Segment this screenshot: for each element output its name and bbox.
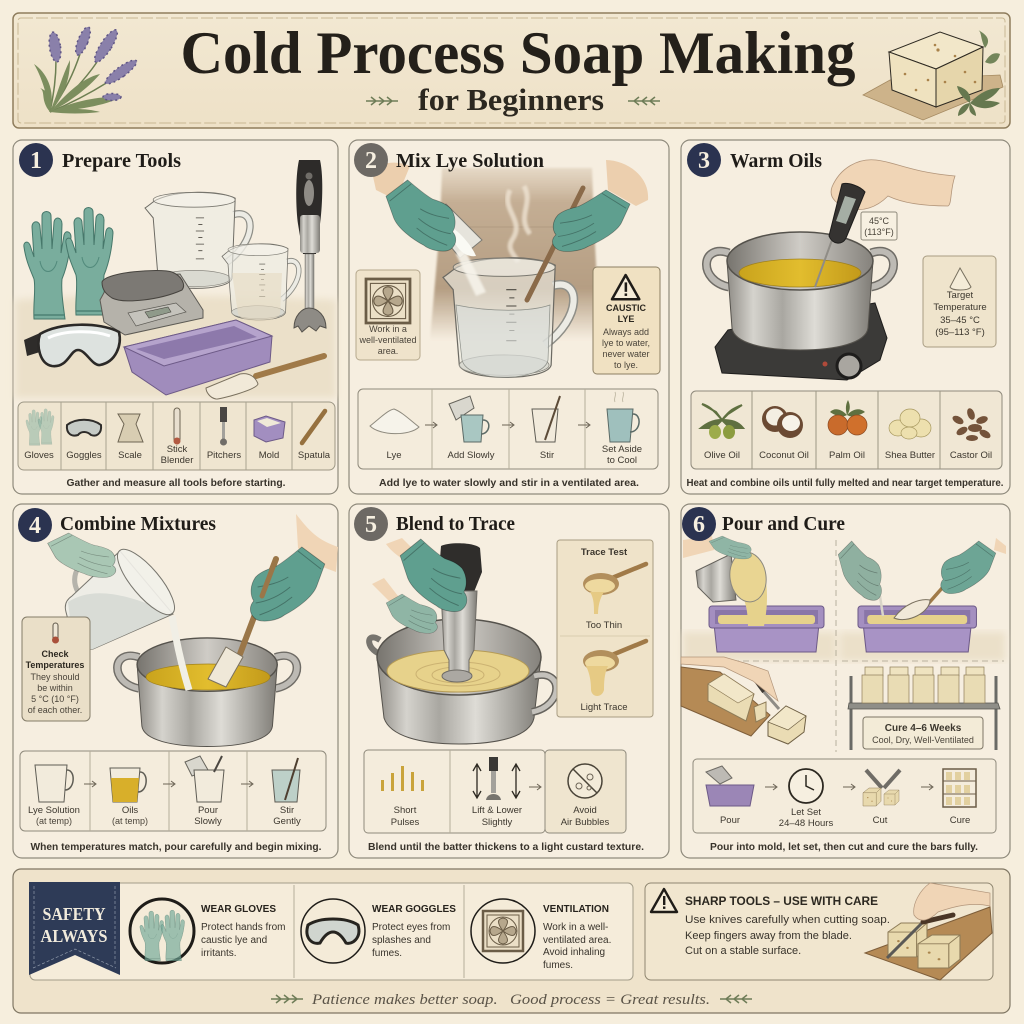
- icon: mini gloves: [26, 409, 54, 445]
- icon: small pitcher: [222, 244, 299, 322]
- panel: mix lye solution: [349, 140, 669, 494]
- icon: steel pot with oil: [117, 638, 297, 746]
- icon: safety goggles: [24, 325, 120, 366]
- tool labels: Spatula: [298, 450, 331, 461]
- check temperatures note: They should: [30, 672, 80, 682]
- heading: Prepare Tools: [62, 150, 181, 172]
- icon: lavender bouquet: [34, 25, 139, 114]
- ventilation note: Work in a: [369, 324, 407, 334]
- target temperature note: Temperature: [933, 302, 987, 313]
- icon: stir: [532, 396, 560, 442]
- sharp tools callout: Keep fingers away from the blade.: [685, 930, 852, 942]
- icon: oils beaker: [110, 768, 146, 802]
- heading: Combine Mixtures: [60, 513, 216, 535]
- strip labels: Pulses: [391, 817, 420, 828]
- panel: pour and cure: [681, 504, 1010, 858]
- wear goggles text: Protect eyes from: [372, 922, 450, 933]
- step badge 6: [682, 507, 716, 541]
- icon: mini mold pour: [706, 766, 754, 806]
- panel: prepare tools: [13, 140, 338, 494]
- step badge 3: 3: [698, 148, 710, 174]
- caption: Gather and measure all tools before starting.: [66, 477, 286, 489]
- strip labels: [720, 807, 970, 829]
- icon: digital scale: [100, 270, 203, 335]
- check temperatures note: be within: [37, 683, 73, 693]
- strip labels: Shea Butter: [885, 450, 935, 461]
- wear gloves text: [201, 904, 285, 959]
- trace test panel: Trace Test: [581, 547, 628, 558]
- cure duration label: Cure 4–6 Weeks: [885, 723, 962, 734]
- icon: cutting board and bars: [865, 883, 992, 980]
- icon: spatula: [206, 356, 324, 399]
- icon: fan window: [366, 279, 410, 323]
- icon: set aside: [607, 392, 639, 442]
- temperature tag: (113°F): [864, 227, 894, 237]
- process strip: [364, 750, 626, 833]
- arrows: [84, 781, 253, 787]
- caption: When temperatures match, pour carefully and begin mixing.: [30, 841, 322, 853]
- safety ribbon: ALWAYS: [40, 926, 108, 946]
- strip labels: [704, 450, 992, 461]
- heading: Warm Oils: [730, 150, 822, 172]
- header banner: [13, 13, 1010, 128]
- step badge 1: 1: [30, 148, 42, 174]
- process strip: [358, 389, 658, 469]
- icon: ventilation badge: [471, 899, 535, 963]
- wear gloves text: caustic lye and: [201, 935, 267, 946]
- icon: castor beans: [951, 407, 992, 441]
- strip labels: Stir: [280, 805, 294, 816]
- sharp tools callout: [645, 883, 993, 980]
- tool labels: Stick: [167, 444, 188, 455]
- strip labels: Short: [394, 805, 417, 816]
- trace test panel: Too Thin: [586, 620, 622, 631]
- icon: pitcher with water: [443, 258, 574, 377]
- icon: soap block on board: [863, 30, 1003, 120]
- icon: rubber gloves: [24, 208, 113, 319]
- footer sprig left: [271, 995, 303, 1003]
- caption: Heat and combine oils until fully melted and near target temperature.: [686, 477, 1004, 489]
- ventilation text: Avoid inhaling: [543, 947, 605, 958]
- wear gloves text: Protect hands from: [201, 922, 285, 933]
- tool labels: Goggles: [66, 450, 102, 461]
- icon: short pulses bars: [381, 766, 424, 791]
- caustic lye warning: LYE: [618, 314, 634, 324]
- target temperature note: [923, 256, 996, 347]
- tool labels: Scale: [118, 450, 142, 461]
- step badge 4: [18, 508, 52, 542]
- sharp tools callout: Use knives carefully when cutting soap.: [685, 914, 890, 926]
- icon: right gloved hand: [250, 514, 338, 621]
- icon: mini thermometer: [174, 408, 180, 444]
- scene: curing rack: [848, 667, 1000, 750]
- wear goggles text: WEAR GOGGLES: [372, 904, 456, 915]
- icon: goggles badge: [301, 899, 365, 963]
- icon: coconut: [762, 406, 803, 438]
- step badge 6: 6: [693, 512, 705, 538]
- icon: too thin spoon: [583, 564, 646, 614]
- step badge 1: [19, 143, 53, 177]
- wear goggles text: [372, 904, 456, 959]
- strip labels: Oils: [122, 805, 138, 816]
- wear goggles text: fumes.: [372, 948, 402, 959]
- oils strip: [691, 391, 1002, 469]
- strip labels: [391, 805, 610, 828]
- sharp tools callout: SHARP TOOLS – USE WITH CARE: [685, 896, 878, 908]
- strip labels: Coconut Oil: [759, 450, 809, 461]
- ventilation text: fumes.: [543, 960, 573, 971]
- tool label strip: [18, 402, 335, 470]
- strip labels: to Cool: [607, 455, 637, 466]
- caustic lye warning: CAUSTIC: [606, 303, 646, 313]
- sharp tools callout: Cut on a stable surface.: [685, 945, 801, 957]
- strip labels: Add Slowly: [448, 450, 495, 461]
- heading: Blend to Trace: [396, 513, 515, 535]
- icon: right glove: [552, 190, 630, 251]
- icon: hand: [831, 160, 955, 210]
- icon: stick blender: [439, 543, 482, 682]
- step badge 4: 4: [29, 513, 41, 539]
- icon: mini blender: [220, 407, 227, 446]
- icon: stick blender: [294, 160, 326, 332]
- icon: arrow: [529, 784, 541, 790]
- icon: upper gloved hand: [386, 538, 467, 612]
- icon: spatula: [208, 559, 276, 687]
- panel: safety always: [13, 869, 1010, 1013]
- caustic lye warning: never water: [602, 349, 650, 359]
- tool labels: [24, 444, 331, 466]
- target temperature note: Target: [947, 290, 974, 301]
- heading: Mix Lye Solution: [396, 150, 544, 172]
- ventilation text: VENTILATION: [543, 904, 609, 915]
- temperature tag: 45°C: [869, 216, 890, 226]
- icon: no air bubbles: [568, 764, 602, 798]
- icon: palm fruit: [828, 400, 867, 435]
- check temperatures note: 5 °C (10 °F): [31, 694, 79, 704]
- strip labels: [387, 444, 642, 466]
- caustic lye warning: lye to water,: [602, 338, 650, 348]
- strip labels: (at temp): [36, 816, 72, 826]
- strip labels: Let Set: [791, 807, 821, 818]
- icon: lye pour: [432, 204, 486, 296]
- strip labels: Air Bubbles: [561, 817, 610, 828]
- wear gloves text: WEAR GLOVES: [201, 904, 276, 915]
- icon: mini scale: [118, 414, 143, 442]
- icon: mini goggles: [67, 420, 101, 436]
- icon: left gloved hand: [48, 533, 116, 577]
- scene: smoothing in mold: [838, 538, 1006, 652]
- caustic lye warning: Always add: [603, 327, 649, 337]
- ventilation text: [543, 904, 611, 971]
- strip labels: Lye: [387, 450, 401, 461]
- icon: clock: [789, 769, 823, 803]
- strip labels: Lift & Lower: [472, 805, 522, 816]
- icon: pour stream: [172, 616, 189, 690]
- strip labels: [28, 805, 301, 827]
- caustic lye warning: [593, 267, 660, 374]
- footer tagline: Patience makes better soap. Good process = Great results.: [311, 992, 710, 1008]
- icon: pot with batter: [369, 619, 556, 744]
- strip labels: Slightly: [482, 817, 513, 828]
- icon: small warning bell: [950, 268, 971, 290]
- check temperatures note: [22, 617, 90, 721]
- ventilation note: well-ventilated: [358, 335, 417, 345]
- strip labels: Lye Solution: [28, 805, 80, 816]
- icon: lye pile: [370, 409, 419, 434]
- subtitle ornaments: [366, 97, 660, 105]
- ventilation text: Work in a well-: [543, 922, 608, 933]
- icon: thermometer: [52, 623, 59, 644]
- strip labels: Pour: [720, 815, 740, 826]
- scene: pouring into mold: [683, 536, 824, 652]
- tool labels: Blender: [161, 455, 193, 466]
- strip labels: Pour: [198, 805, 218, 816]
- step badge 2: 2: [365, 148, 377, 174]
- caption: Pour into mold, let set, then cut and cure the bars fully.: [710, 841, 978, 853]
- icon: purple mold: [124, 320, 272, 395]
- panel: blend to trace: [349, 504, 669, 858]
- ventilation note: area.: [378, 346, 398, 356]
- tool labels: Mold: [259, 450, 279, 461]
- icon: mini mold: [254, 416, 285, 442]
- step badge 3: [687, 143, 721, 177]
- icon: large pitcher: [145, 192, 250, 288]
- trace test panel: [557, 540, 653, 717]
- title: Cold Process Soap Making: [180, 20, 856, 86]
- icon: warning triangle: [612, 275, 639, 299]
- strip labels: Olive Oil: [704, 450, 740, 461]
- target temperature note: 35–45 °C: [940, 315, 980, 326]
- arrows: [425, 422, 590, 428]
- ventilation note: [356, 270, 420, 360]
- trace test panel: Light Trace: [580, 702, 628, 713]
- panel: warm oils: [681, 140, 1010, 494]
- icon: lower gloved hand: [372, 578, 437, 633]
- strip labels: Avoid: [573, 805, 597, 816]
- caption: Add lye to water slowly and stir in a ventilated area.: [379, 477, 639, 489]
- wear goggles text: splashes and: [372, 935, 431, 946]
- strip labels: Cut: [873, 815, 888, 826]
- icon: stir: [272, 758, 300, 802]
- icon: pour: [185, 756, 224, 802]
- step badge 5: 5: [365, 512, 377, 538]
- strip labels: Set Aside: [602, 444, 642, 455]
- strip labels: Slowly: [194, 816, 222, 827]
- safety ribbon: SAFETY: [42, 904, 106, 924]
- footer sprig right: [720, 995, 752, 1003]
- step badge 2: [354, 143, 388, 177]
- tool labels: Gloves: [24, 450, 54, 461]
- icon: tilted pitcher: [65, 542, 183, 649]
- icon: steel pot with oil: [706, 232, 894, 350]
- strip labels: Stir: [540, 450, 554, 461]
- tool labels: Pitchers: [207, 450, 241, 461]
- icon: warning triangle: [651, 889, 677, 912]
- icon: light trace spoon: [583, 641, 646, 696]
- icon: left glove: [386, 180, 456, 251]
- icon: mini rack: [943, 769, 976, 807]
- icon: hot plate: [715, 303, 887, 380]
- caption: Blend until the batter thickens to a light custard texture.: [368, 841, 644, 853]
- icon: cutter and bars: [863, 770, 900, 806]
- icon: lye beaker: [35, 765, 73, 802]
- process strip: [20, 751, 326, 831]
- icon: shea butter: [889, 409, 931, 439]
- scene: cutting bars: [681, 657, 806, 744]
- safety ribbon: [29, 882, 120, 975]
- strip labels: Castor Oil: [950, 450, 992, 461]
- icon: add slowly: [449, 396, 489, 442]
- person in apron: [372, 160, 648, 340]
- icon: thermometer: [815, 183, 865, 287]
- icon: gloves badge: [130, 899, 194, 963]
- strip labels: (at temp): [112, 816, 148, 826]
- cure duration label: Cool, Dry, Well-Ventilated: [872, 735, 974, 745]
- target temperature note: (95–113 °F): [935, 327, 985, 338]
- ventilation text: ventilated area.: [543, 935, 611, 946]
- check temperatures note: Check: [41, 649, 70, 659]
- temperature tag: [861, 212, 897, 240]
- process strip: [693, 759, 996, 833]
- subtitle: for Beginners: [418, 82, 604, 117]
- strip labels: Palm Oil: [829, 450, 865, 461]
- caustic lye warning: to lye.: [614, 360, 638, 370]
- icon: mini spatula: [302, 411, 325, 443]
- icon: stirring rod: [527, 188, 583, 300]
- wear gloves text: irritants.: [201, 948, 237, 959]
- step badge 5: [354, 507, 388, 541]
- strip labels: 24–48 Hours: [779, 818, 833, 829]
- heading: Pour and Cure: [722, 513, 845, 535]
- strip labels: Cure: [950, 815, 970, 826]
- strip labels: Gently: [273, 816, 301, 827]
- panel: combine mixtures: [13, 504, 338, 858]
- arrows: [765, 784, 933, 790]
- cure duration label: [863, 717, 983, 749]
- icon: steam: [508, 186, 530, 262]
- icon: olives: [701, 404, 743, 439]
- check temperatures note: Temperatures: [26, 660, 84, 670]
- check temperatures note: of each other.: [28, 705, 82, 715]
- safety items box: [29, 882, 633, 980]
- icon: lift and lower: [473, 757, 520, 800]
